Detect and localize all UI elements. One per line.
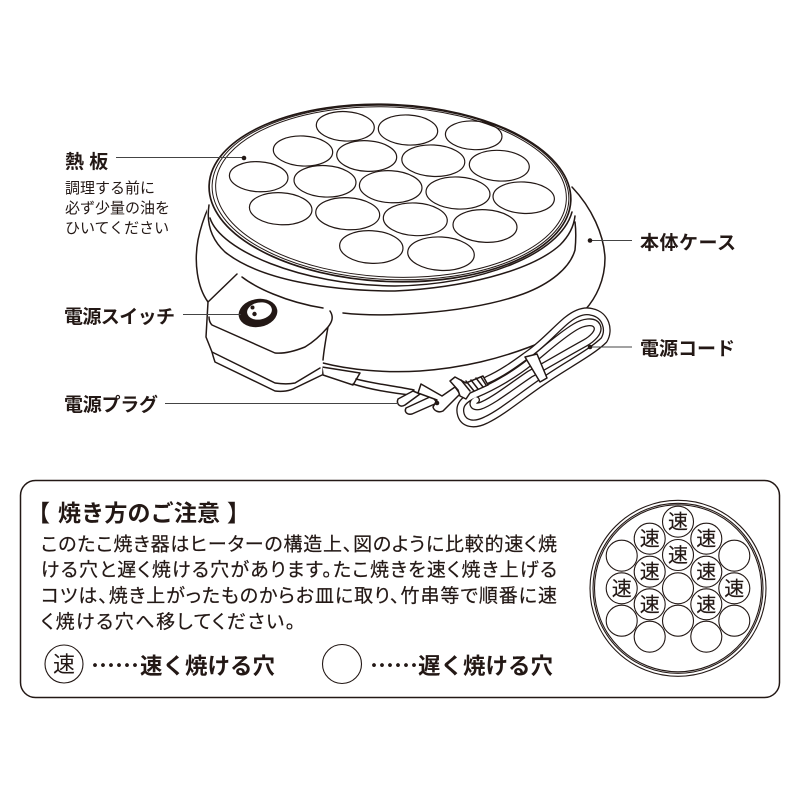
label: power cord: 電源コード (640, 338, 735, 360)
diagram: hole heating speeds: 速 (612, 577, 632, 600)
plate holes (229, 110, 555, 272)
power plug (397, 384, 460, 414)
leader line: power plug (165, 402, 398, 404)
label: power plug: 電源プラグ (64, 393, 158, 416)
label: power cord (588, 338, 735, 360)
label: main body case: 本体ケース (640, 232, 736, 254)
panel: cooking caution (20, 480, 780, 698)
legend: fast holes (45, 645, 275, 683)
leader line: power cord (588, 345, 632, 349)
legend: fast holes: 速く焼ける穴 (140, 654, 275, 679)
diagram: hole heating speeds: 速 (640, 593, 660, 616)
label: heating plate: 熱 板 (65, 151, 108, 173)
note: oil the plate (65, 180, 170, 237)
panel heading: 焼き方のご注意 (58, 500, 220, 526)
panel heading: 【 (27, 500, 50, 526)
power cord loop (460, 311, 607, 423)
leader line: power switch (183, 314, 241, 316)
label: heating plate (65, 151, 246, 173)
panel body text: ける穴と遅く焼ける穴があります。たこ焼きを速く焼き上げる (41, 559, 557, 581)
rim lines (343, 222, 576, 315)
legend: slow holes: 遅く焼ける穴 (418, 654, 553, 679)
body case (195, 187, 605, 372)
label: main body case (588, 232, 736, 254)
leader line: heating plate (116, 156, 246, 160)
illustration: takoyaki maker (195, 97, 607, 423)
note: oil the plate: 調理する前に (65, 180, 155, 197)
diagram: hole heating speeds: 速 (696, 528, 716, 551)
legend: slow holes: …… (370, 646, 418, 681)
cord band (525, 354, 547, 382)
legend: fast holes: …… (91, 646, 139, 681)
cord strain relief at body (322, 367, 360, 385)
panel body text (41, 534, 557, 633)
plate skirt (207, 205, 575, 291)
legend: slow holes (322, 644, 553, 684)
label: power switch: 電源スイッチ (64, 306, 175, 328)
panel heading: 】 (227, 500, 250, 526)
panel body text: このたこ焼き器はヒーターの構造上、図のように比較的速く焼 (41, 534, 557, 556)
diagram: hole heating speeds: 速 (640, 528, 660, 551)
note: oil the plate: ひいてください (65, 220, 169, 237)
note: oil the plate: 必ず少量の油を (65, 200, 170, 217)
panel body text: く焼ける穴へ移してください。 (41, 611, 295, 633)
power switch (236, 296, 280, 330)
diagram: hole heating speeds: 速 (668, 544, 688, 567)
switch housing (206, 274, 332, 391)
heating plate (205, 97, 575, 291)
diagram: hole heating speeds: 速 (724, 577, 744, 600)
plate rings (205, 97, 575, 289)
leader line: body case (588, 238, 632, 243)
panel body text: コツは、焼き上がったものからお皿に取り、竹串等で順番に速 (41, 585, 557, 607)
diagram: hole heating speeds: 速 (640, 561, 660, 584)
diagram: hole heating speeds (590, 500, 766, 676)
legend: fast holes: 速 (53, 652, 75, 677)
plug strain relief (450, 376, 488, 399)
diagram: hole heating speeds: 速 (696, 593, 716, 616)
diagram: hole heating speeds: 速 (668, 511, 688, 534)
diagram: hole heating speeds: 速 (696, 561, 716, 584)
